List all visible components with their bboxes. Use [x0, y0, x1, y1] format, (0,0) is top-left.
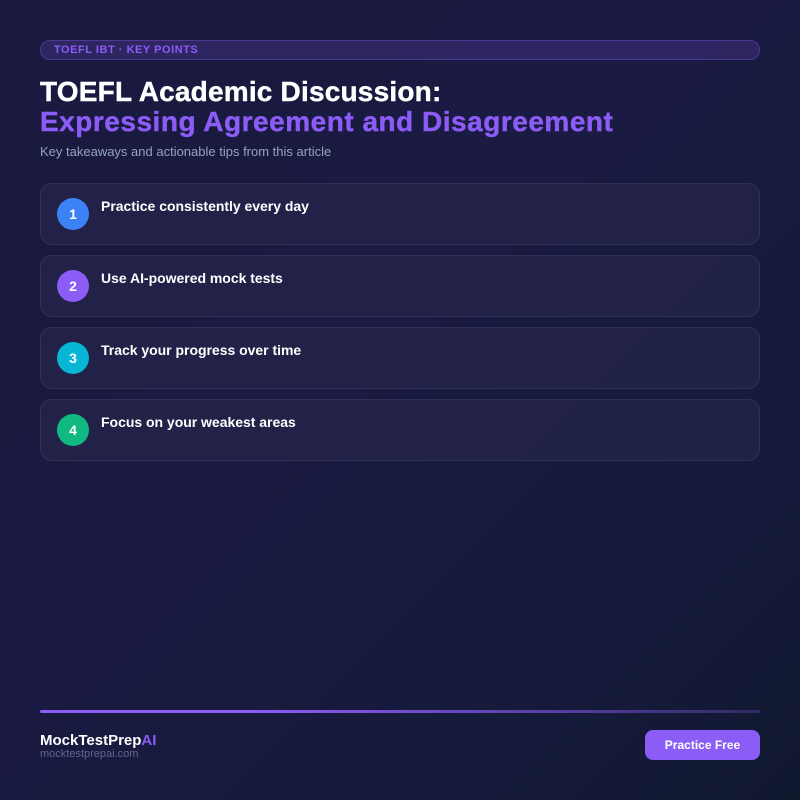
number badge 3 — [57, 342, 89, 374]
brand name: MockTestPrepAI — [40, 732, 156, 749]
number badge 4: 4 — [69, 422, 77, 438]
title line 2: Expressing Agreement and Disagreement — [40, 106, 613, 137]
brand url: mocktestprepai.com — [40, 748, 138, 760]
panel: tip 1 — [40, 183, 760, 245]
number badge 2 — [57, 270, 89, 302]
panel: tip 3 — [40, 327, 760, 389]
title — [40, 76, 613, 138]
title line 1: TOEFL Academic Discussion: — [40, 76, 441, 107]
tip 4 text: Focus on your weakest areas — [101, 414, 296, 430]
footer accent bar — [40, 710, 760, 713]
panel: tip 2 — [40, 255, 760, 317]
number badge 1: 1 — [69, 206, 77, 222]
number badge 2: 2 — [69, 278, 77, 294]
call-to-action button: Practice Free — [665, 738, 740, 752]
brand block — [40, 732, 156, 760]
panel: tip 4 — [40, 399, 760, 461]
call-to-action button — [645, 730, 760, 760]
tip 3 text: Track your progress over time — [101, 342, 301, 358]
subtitle: Key takeaways and actionable tips from this article — [40, 144, 331, 159]
number badge 3: 3 — [69, 350, 77, 366]
number badge 4 — [57, 414, 89, 446]
tip 1 text: Practice consistently every day — [101, 198, 309, 214]
badge: TOEFL iBT key points — [40, 40, 760, 60]
number badge 1 — [57, 198, 89, 230]
tip 2 text: Use AI-powered mock tests — [101, 270, 283, 286]
badge: TOEFL iBT key points: TOEFL IBT · KEY POINTS — [54, 44, 198, 56]
